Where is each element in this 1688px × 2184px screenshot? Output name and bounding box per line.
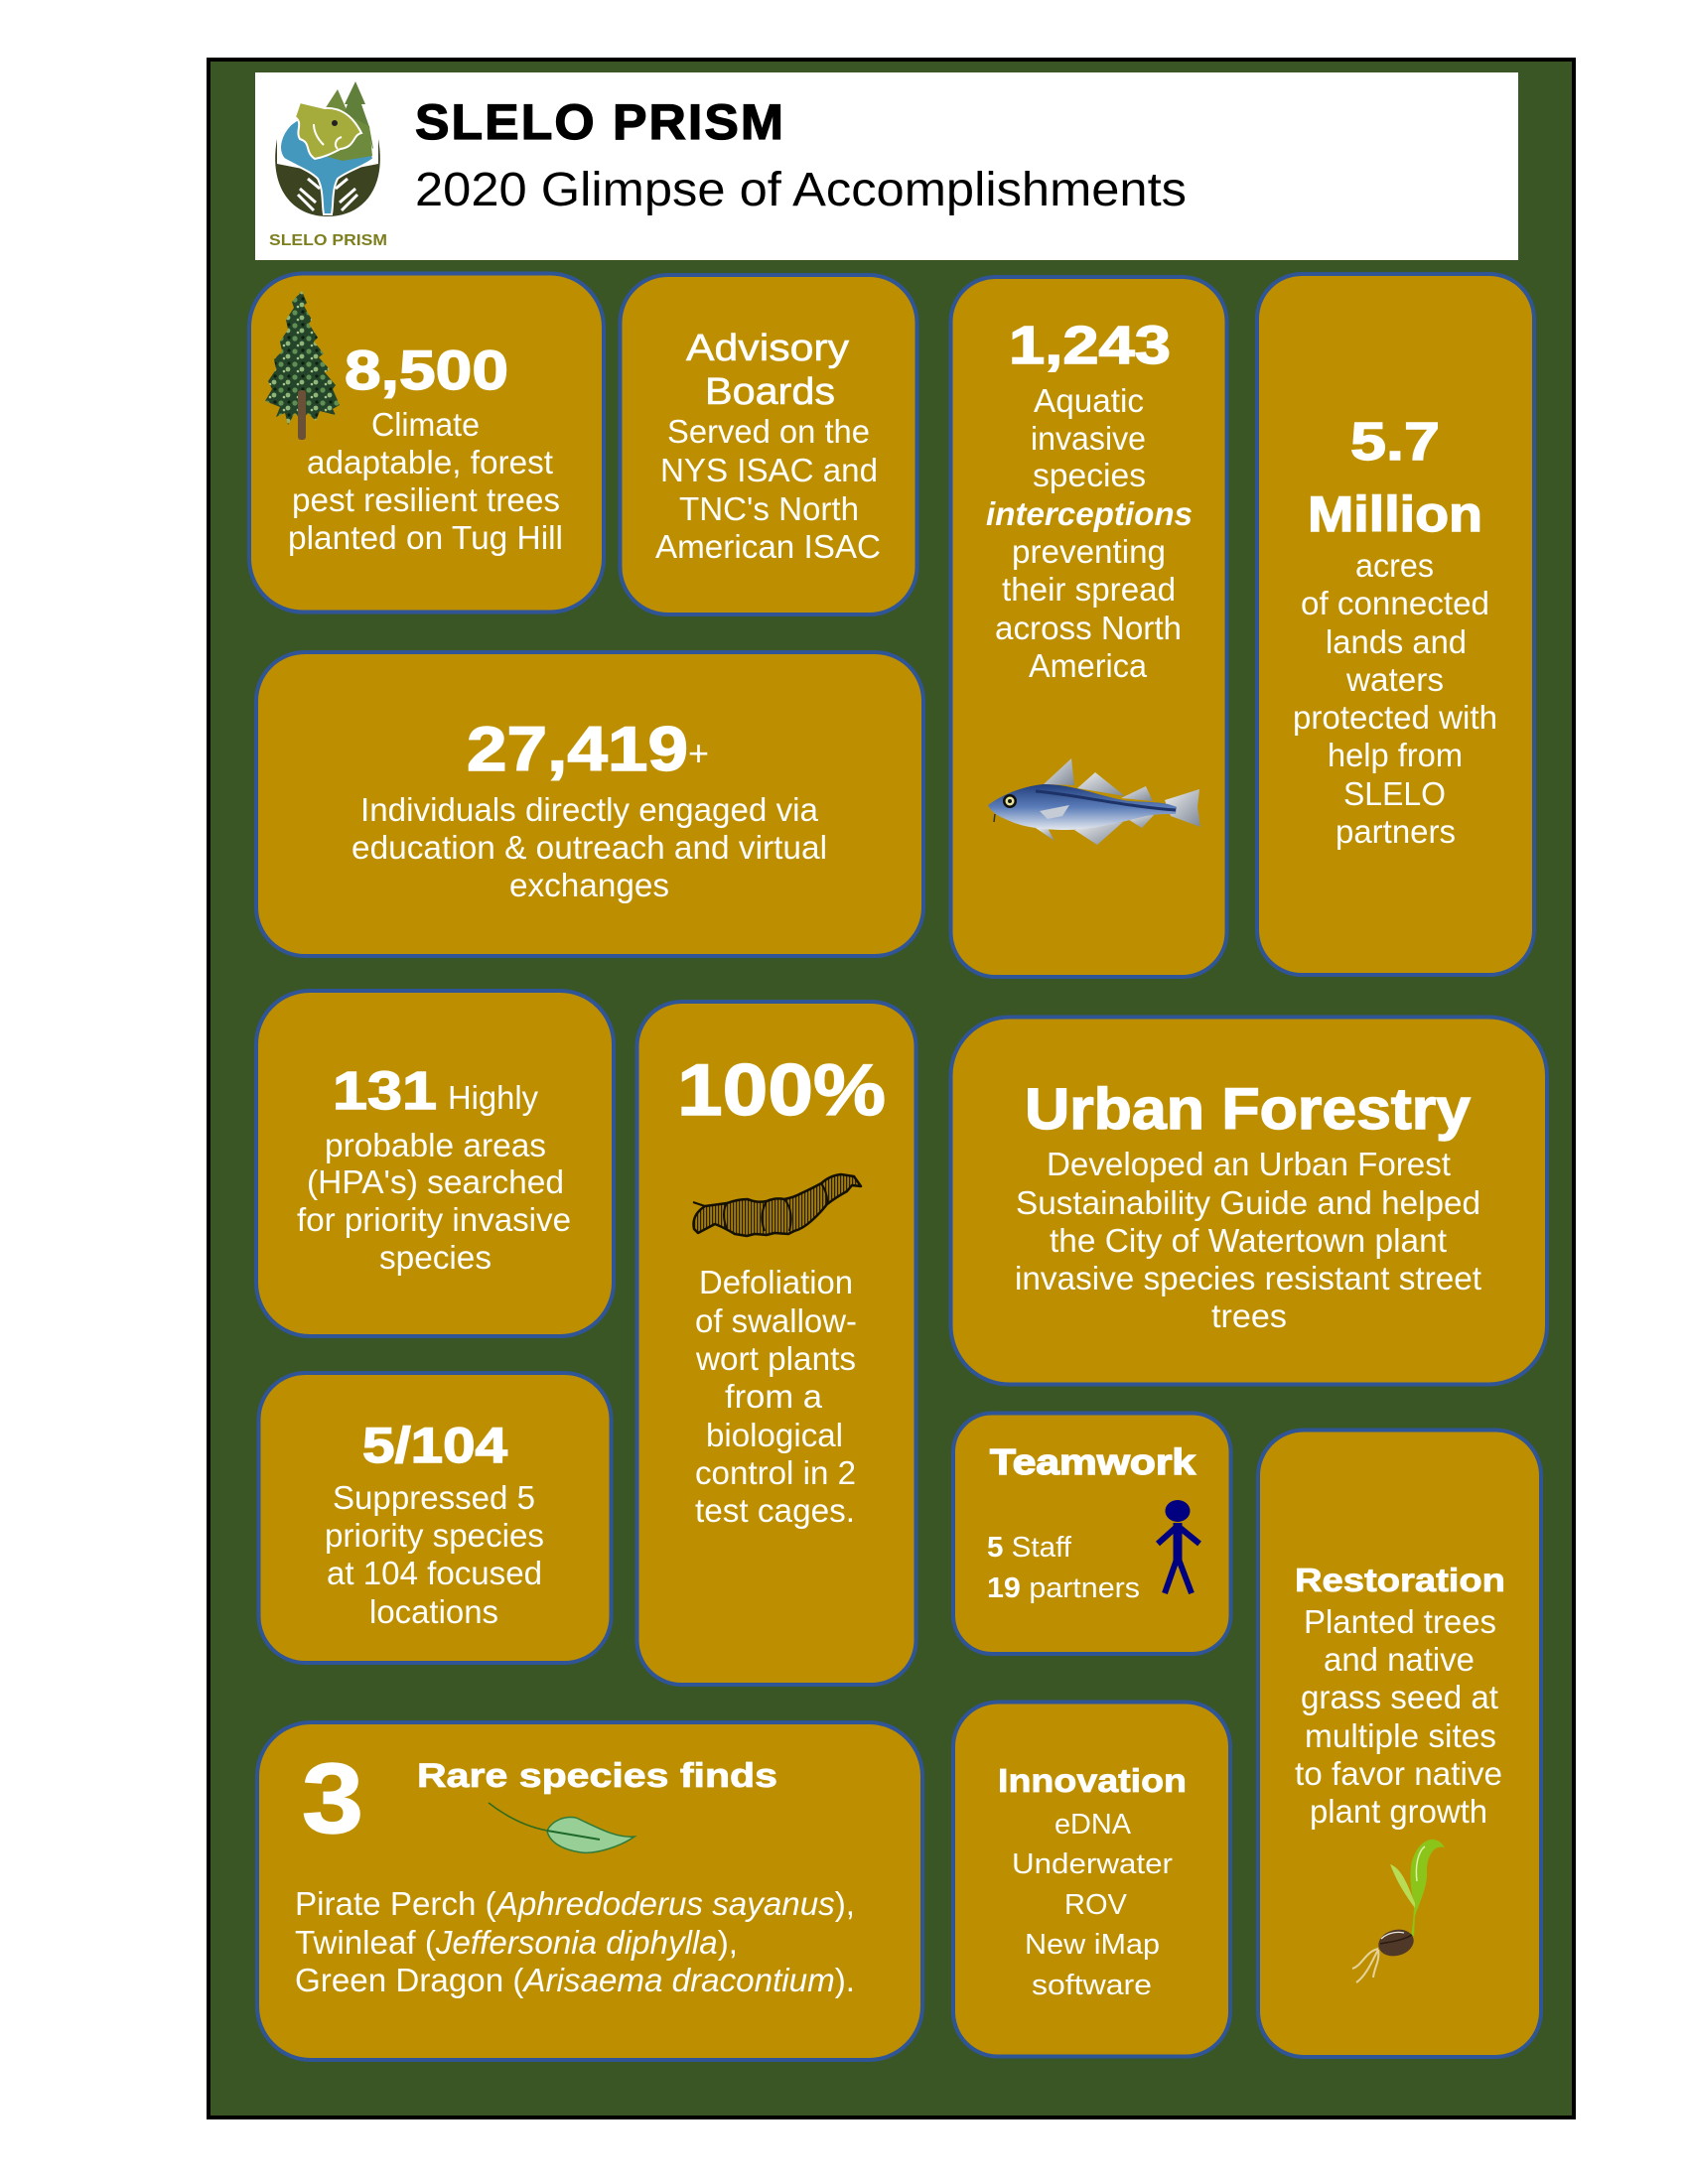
description [352, 791, 827, 903]
description [1295, 1603, 1502, 1830]
stat number: 3 [302, 1743, 363, 1854]
description: Green Dragon (Arisaema dracontium). [295, 1962, 855, 1998]
icon: sprouting seed [1352, 1840, 1445, 1982]
description: Aquatic [1034, 382, 1144, 419]
description: preventing [1012, 533, 1166, 570]
description: Individuals directly engaged via [360, 791, 819, 828]
panel: restoration [1258, 1430, 1541, 2057]
description: species [379, 1239, 492, 1276]
description: Sustainability Guide and helped [1016, 1184, 1480, 1221]
description: trees [1211, 1297, 1287, 1334]
background frame [209, 60, 1574, 2117]
description: exchanges [509, 867, 669, 903]
heading: Rare species finds [417, 1757, 777, 1795]
description [655, 413, 881, 565]
heading: Urban Forestry [1025, 1077, 1471, 1142]
stat number [1308, 412, 1482, 542]
description: Served on the [667, 413, 870, 450]
heading [686, 328, 849, 413]
icon: leaf [489, 1803, 634, 1852]
icon: stick person [1158, 1500, 1199, 1593]
list: software [1032, 1970, 1152, 2001]
title: SLELO PRISM [415, 94, 785, 150]
description: Defoliation [699, 1264, 853, 1300]
description: across North [995, 610, 1182, 646]
panel: 100% defoliation [637, 1002, 915, 1685]
description: and native [1324, 1641, 1475, 1678]
list: eDNA [1055, 1809, 1132, 1841]
description: species [1033, 457, 1146, 493]
stat number: 8,500 [345, 339, 508, 401]
subtitle: 2020 Glimpse of Accomplishments [415, 164, 1187, 216]
staff counts [987, 1532, 1140, 1604]
icon: SLELO PRISM logo [269, 81, 387, 249]
description: grass seed at [1301, 1679, 1498, 1715]
description [1015, 1146, 1481, 1334]
description: NYS ISAC and [660, 452, 878, 488]
description: partners [1336, 813, 1456, 850]
description: multiple sites [1305, 1717, 1496, 1754]
description: adaptable, forest [307, 444, 553, 480]
panel: 8,500 trees [249, 274, 604, 612]
stat number: 100% [677, 1050, 886, 1131]
description: Climate [371, 406, 480, 443]
description [297, 1079, 571, 1276]
description: plant growth [1310, 1793, 1487, 1830]
panel: 5/104 suppressed [258, 1373, 612, 1663]
description: for priority invasive [297, 1201, 571, 1238]
panel: teamwork [953, 1414, 1231, 1654]
list: ROV [1064, 1889, 1128, 1921]
panel: rare species [257, 1722, 922, 2060]
icon: fish [988, 758, 1200, 845]
description [288, 406, 563, 556]
heading: Boards [705, 371, 835, 413]
description: TNC's North [679, 490, 859, 527]
panel: 27,419 individuals [256, 652, 923, 956]
panel: innovation [953, 1702, 1230, 2057]
description: biological [706, 1417, 843, 1453]
description: invasive species resistant street [1015, 1260, 1481, 1297]
description: locations [369, 1593, 498, 1630]
description: of swallow- [695, 1302, 857, 1339]
description: the City of Watertown plant [1050, 1222, 1447, 1259]
panel: urban forestry [951, 1017, 1547, 1384]
panel: aquatic interceptions [951, 277, 1227, 977]
description: help from [1328, 737, 1463, 773]
description: (HPA's) searched [307, 1163, 564, 1200]
panel: 5.7 million acres [1257, 274, 1534, 975]
description [325, 1479, 544, 1630]
description: from a [725, 1378, 823, 1415]
description: American ISAC [655, 528, 881, 565]
description: their spread [1002, 571, 1176, 608]
stat number: 5/104 [362, 1418, 507, 1473]
description: Highly [448, 1079, 538, 1116]
description [1293, 547, 1497, 850]
description: at 104 focused [327, 1555, 542, 1591]
heading: Restoration [1295, 1562, 1505, 1598]
description: Developed an Urban Forest [1047, 1146, 1451, 1182]
heading: Innovation [998, 1762, 1187, 1799]
description [986, 382, 1193, 684]
heading: Advisory [686, 328, 849, 369]
description: protected with [1293, 699, 1497, 736]
icon: caterpillar [693, 1174, 861, 1236]
header banner [255, 72, 1518, 260]
description: SLELO [1343, 775, 1446, 812]
description: probable areas [325, 1127, 546, 1163]
logo wordmark: SLELO PRISM [269, 232, 387, 249]
stat number: Million [1308, 486, 1482, 542]
description: interceptions [986, 495, 1193, 532]
panel: advisory boards [620, 275, 917, 614]
description: Planted trees [1304, 1603, 1496, 1640]
stat number: 5.7 [1350, 412, 1440, 472]
description: priority species [325, 1517, 544, 1554]
description [295, 1885, 855, 1998]
stat number: 27,419 [467, 715, 688, 784]
description: America [1029, 647, 1148, 684]
description: education & outreach and virtual [352, 829, 827, 866]
description: lands and [1326, 623, 1467, 660]
description: to favor native [1295, 1755, 1502, 1792]
description: Twinleaf (Jeffersonia diphylla), [295, 1924, 738, 1961]
staff counts: 5 Staff [987, 1532, 1072, 1564]
heading: Teamwork [990, 1441, 1196, 1482]
staff counts: 19 partners [987, 1572, 1140, 1604]
list: New iMap [1025, 1929, 1160, 1961]
panel: 131 HPAs [256, 991, 614, 1336]
stat number: 131 [333, 1061, 437, 1121]
description: pest resilient trees [292, 481, 560, 518]
description: planted on Tug Hill [288, 519, 563, 556]
stat number: 1,243 [1009, 316, 1171, 375]
description [695, 1264, 857, 1529]
description: control in 2 [695, 1454, 856, 1491]
stat number: + [688, 733, 709, 773]
description: waters [1345, 661, 1444, 698]
description: of connected [1301, 585, 1489, 621]
description: Suppressed 5 [333, 1479, 535, 1516]
description: test cages. [695, 1492, 855, 1529]
description: invasive [1031, 420, 1146, 457]
icon: pine tree [265, 291, 340, 440]
list [1012, 1809, 1173, 2001]
description: acres [1355, 547, 1434, 584]
list: Underwater [1012, 1848, 1173, 1880]
description: wort plants [695, 1340, 856, 1377]
description: Pirate Perch (Aphredoderus sayanus), [295, 1885, 855, 1922]
